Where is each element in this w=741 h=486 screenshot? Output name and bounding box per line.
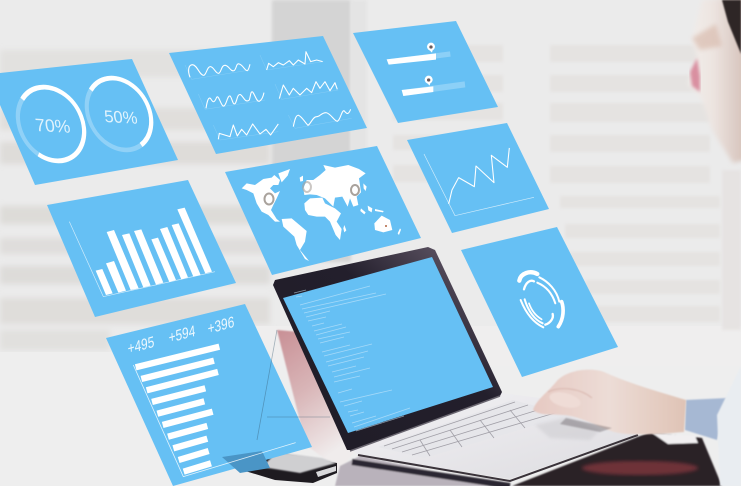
- man's face: [688, 0, 741, 163]
- panel: horizontal bar chart: [106, 304, 330, 486]
- donut gauge 70%: 70%: [34, 115, 72, 137]
- ring segments: [519, 272, 563, 327]
- sparkline grid lines: [185, 55, 352, 140]
- value label +396: +396: [207, 312, 235, 337]
- trackpad shadow: [535, 417, 600, 440]
- line chart series: [449, 148, 509, 204]
- sparkline 3: [206, 92, 264, 108]
- panel: donut gauges: [0, 59, 178, 185]
- phone seen through panel: [222, 451, 270, 473]
- map: North America: [242, 175, 280, 222]
- panel: line chart: [407, 123, 549, 233]
- map: South America: [282, 218, 309, 261]
- laptop hinge: [350, 396, 500, 451]
- panel: sparklines: [169, 36, 367, 154]
- horizontal bars: [136, 347, 219, 472]
- thin perspective lines: [257, 330, 330, 440]
- panel: vertical bar chart: [47, 180, 236, 317]
- donut gauge 50%: [76, 71, 162, 157]
- phone on table: [222, 449, 337, 483]
- man's shirt sleeve: [685, 398, 727, 440]
- slider 2 marker: [425, 76, 433, 86]
- panel: world map: [225, 146, 421, 275]
- value label +594: +594: [168, 321, 196, 346]
- laptop base dark edge: [358, 435, 638, 481]
- value label +495: +495: [127, 332, 155, 357]
- map: Greenland: [278, 169, 290, 182]
- panel: loading ring: [461, 227, 618, 377]
- map: Africa: [304, 198, 342, 240]
- donut gauge 70%: [7, 80, 95, 168]
- man's shirt body: [717, 366, 741, 486]
- laptop: [273, 247, 638, 481]
- man's hand on keyboard: [533, 370, 686, 434]
- laptop base: [352, 393, 638, 479]
- panel: progress sliders: [353, 21, 498, 123]
- bar chart axes: [69, 222, 215, 297]
- table reflection: [277, 330, 356, 470]
- line chart axes: [424, 154, 534, 216]
- map location pins: [264, 182, 387, 227]
- map: Eurasia: [303, 165, 366, 207]
- bar chart axes: [133, 365, 296, 477]
- laptop lid: [273, 247, 502, 450]
- donut gauge 50%: 50%: [103, 107, 139, 128]
- hand shadow over keyboard: [560, 418, 612, 432]
- laptop keyboard: [378, 400, 570, 458]
- man's hair: [722, 0, 741, 54]
- sparkline 1: [189, 64, 250, 77]
- sparkline 2: [267, 52, 323, 70]
- sparkline 4: [279, 82, 337, 99]
- map: Australia: [374, 216, 392, 232]
- slider 2: [402, 76, 465, 96]
- sparkline 5: [218, 124, 278, 139]
- sparkline 6: [293, 109, 351, 127]
- dark table edge: [335, 432, 722, 486]
- map: islands: [300, 176, 401, 235]
- laptop screen with code: [283, 257, 493, 433]
- bars: [96, 208, 212, 295]
- slider 1 marker: [427, 43, 435, 53]
- slider 1: [387, 43, 451, 65]
